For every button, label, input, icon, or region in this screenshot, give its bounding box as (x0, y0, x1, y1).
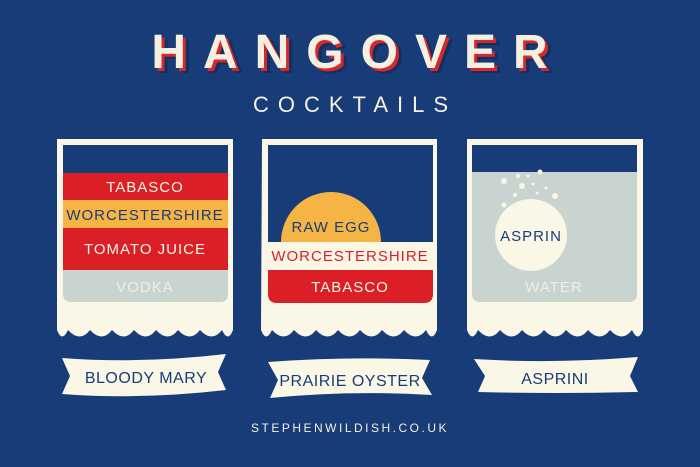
panel: prairie oyster glass: RAW EGG (292, 219, 370, 236)
subtitle: COCKTAILS (253, 92, 457, 117)
panel: asprini glass: WATER (525, 279, 583, 296)
banner: bloody mary: BLOODY MARY (85, 370, 207, 387)
banner: asprini: ASPRINI (521, 371, 589, 388)
panel: bloody mary glass: TOMATO JUICE (84, 241, 206, 258)
banner: asprini (474, 357, 638, 393)
panel: asprini glass (467, 139, 643, 336)
title: HANGOVER (157, 31, 571, 84)
banner: bloody mary (62, 354, 226, 396)
title: HANGOVER (151, 26, 565, 79)
panel: bloody mary glass: TABASCO (106, 179, 184, 196)
panel: asprini glass: ASPRIN (500, 228, 562, 245)
panel: prairie oyster glass: TABASCO (311, 279, 389, 296)
icon: bubbles (501, 170, 558, 208)
panel: prairie oyster glass (261, 139, 437, 336)
panel: prairie oyster glass: WORCESTERSHIRE (271, 248, 429, 265)
panel: bloody mary glass: VODKA (116, 279, 174, 296)
panel: bloody mary glass: WORCESTERSHIRE (66, 207, 224, 224)
title: HANGOVER (154, 29, 568, 82)
footer url: STEPHENWILDISH.CO.UK (251, 421, 449, 435)
panel: bloody mary glass (57, 139, 233, 336)
banner: prairie oyster: PRAIRIE OYSTER (279, 373, 421, 390)
banner: prairie oyster (268, 358, 432, 398)
